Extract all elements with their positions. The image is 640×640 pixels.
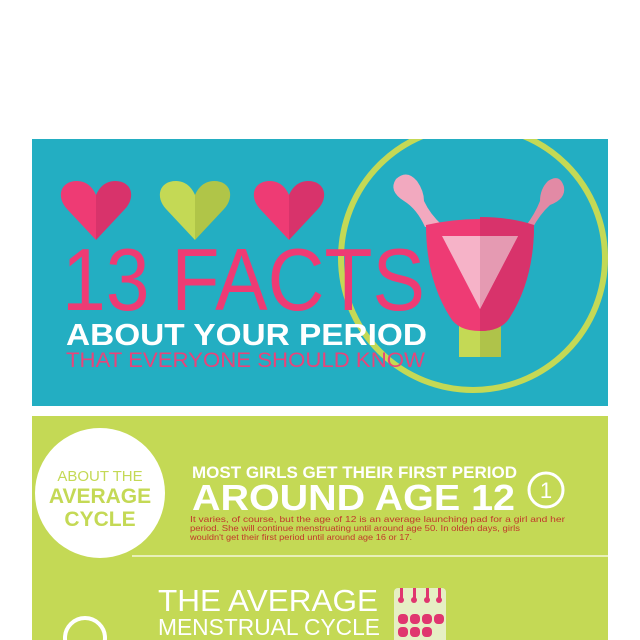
panel: average cycle [32,416,608,640]
badge: about the average cycle [35,428,165,558]
icon: green ring [341,126,605,390]
fact 1 body: It varies, of course, but the age of 12 is an average launching pad for a girl and her [190,514,565,524]
number 2 [65,618,105,640]
icon: uterus [393,174,564,357]
panel: average cycle: MENSTRUAL CYCLE [158,614,380,640]
panel: header [32,139,608,406]
fact 1 body: period. She will continue menstruating until around age 50. In olden days, girls [190,523,520,533]
badge: about the average cycle: ABOUT THE [57,468,143,485]
fact 1 body: wouldn't get their first period until around age 16 or 17. [189,532,412,542]
number 1: 1 [540,478,552,503]
number 1 [529,473,563,507]
tagline: THAT EVERYONE SHOULD KNOW [66,349,425,372]
badge: about the average cycle: AVERAGE [49,485,151,508]
subtitle: ABOUT YOUR PERIOD [66,317,427,352]
fact 1 heading: MOST GIRLS GET THEIR FIRST PERIOD [192,463,517,482]
icon: hearts [61,181,324,240]
icon: calendar [394,588,446,640]
fact 1 body [189,514,565,542]
title: 13 FACTS: 13 FACTS [62,230,425,329]
fact 2 heading: THE AVERAGE [158,583,378,618]
badge: about the average cycle: CYCLE [64,508,136,531]
fact 1 big text: AROUND AGE 12 [192,477,515,518]
